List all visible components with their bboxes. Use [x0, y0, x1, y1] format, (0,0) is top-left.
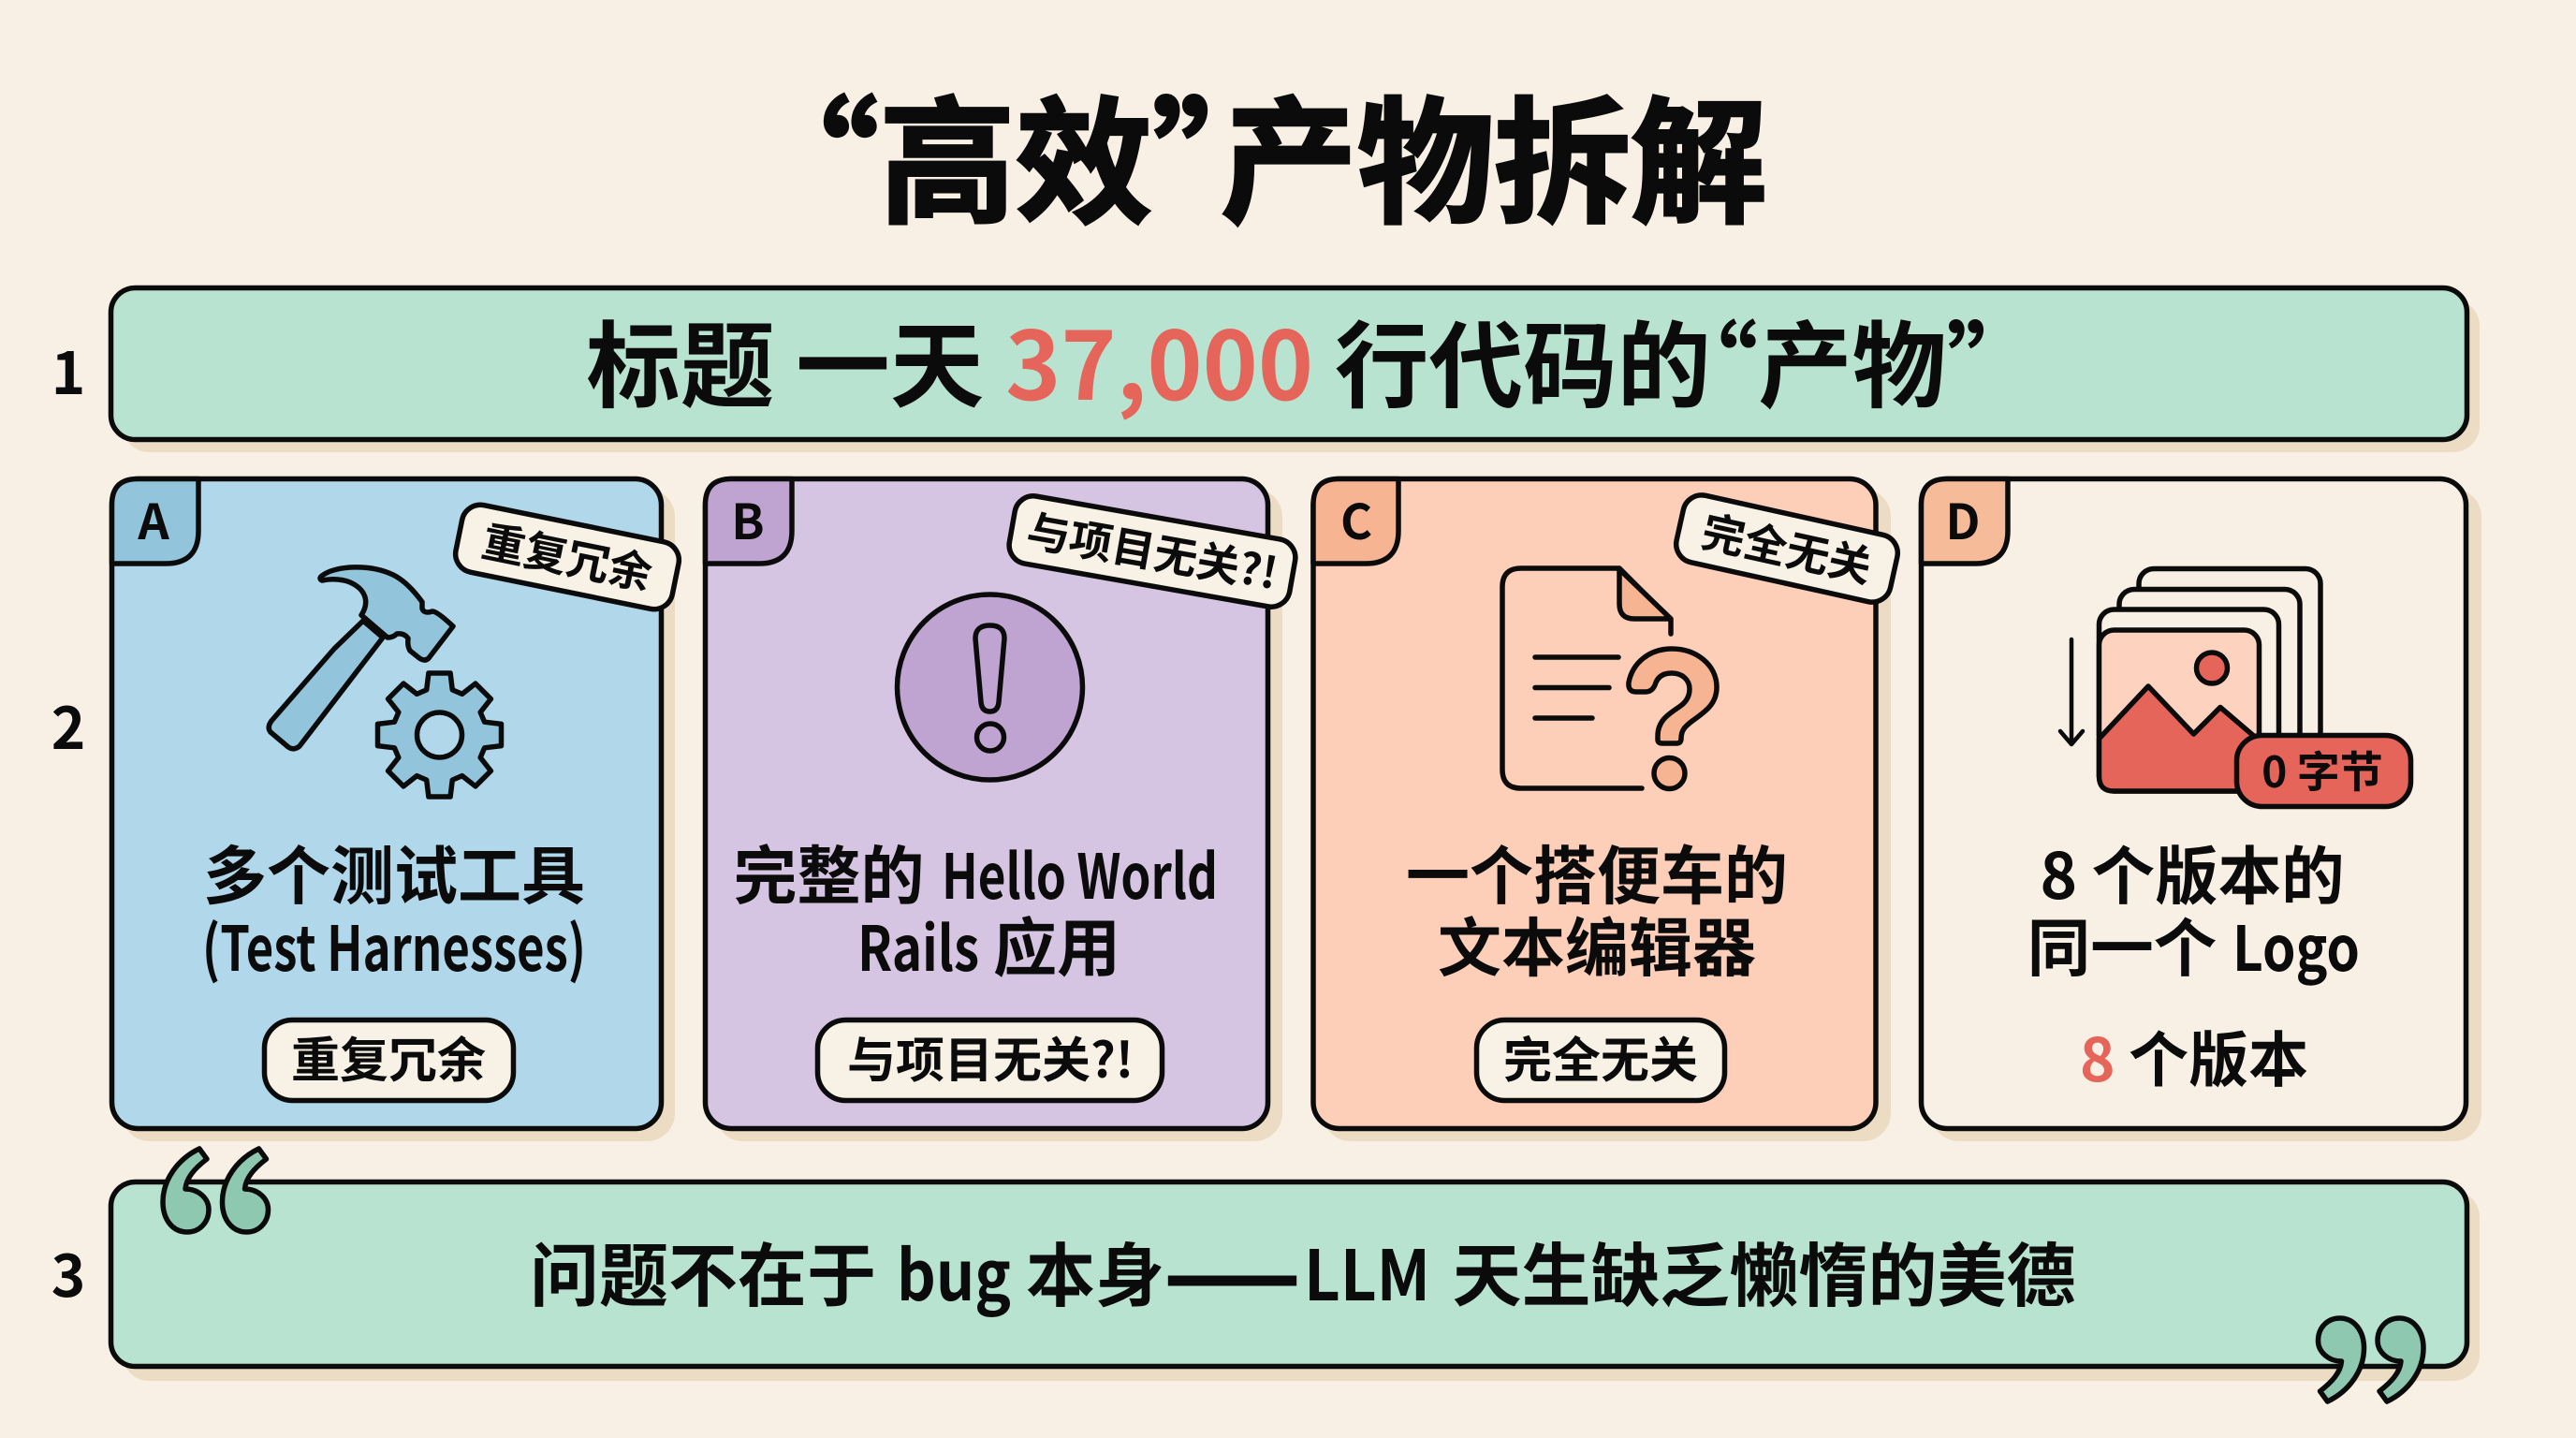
- quote text: 本身: [1026, 1221, 1164, 1321]
- tab A: A: [137, 483, 169, 553]
- panel: headline banner: [110, 288, 2480, 452]
- quote text: 问题不在于: [530, 1221, 876, 1321]
- card A title: [202, 825, 586, 990]
- card C title: 文本编辑器: [1438, 897, 1756, 990]
- card B title: Rails: [857, 900, 979, 990]
- card D title: 8 个版本的: [2040, 827, 2345, 917]
- card A title: (Test Harnesses): [202, 900, 586, 990]
- badge: 0 字节: [2237, 736, 2411, 807]
- pill: 完全无关: [1477, 1020, 1724, 1101]
- card C title: 一个搭便车的: [1406, 825, 1788, 917]
- card C title: [1406, 825, 1788, 990]
- version count: 8 个版本: [2080, 1013, 2308, 1099]
- arrow: down: [2060, 639, 2083, 744]
- row number 2: 2: [51, 682, 85, 766]
- card B title: [733, 825, 1218, 990]
- sticker: 重复冗余: 重复冗余: [477, 507, 658, 603]
- panel: card D logo versions: [1921, 479, 2481, 1141]
- sticker: 完全无关: 完全无关: [1696, 498, 1878, 595]
- tab B: [706, 479, 792, 564]
- quote text: LLM: [1304, 1221, 1430, 1321]
- panel: card C text editor: [1313, 479, 1901, 1141]
- headline text: 标题 一天 37,000 行代码的“产物”: [586, 290, 1994, 427]
- quote text: ——: [1166, 1221, 1298, 1321]
- sticker: 完全无关: [1673, 492, 1901, 606]
- tab C: C: [1340, 483, 1372, 553]
- sticker: 重复冗余: [452, 502, 682, 612]
- tab D: D: [1945, 483, 1981, 553]
- sticker: 与项目无关: 与项目无关?!: [1022, 497, 1282, 602]
- card D title: Logo: [2232, 900, 2360, 990]
- card D title: 同一个: [2027, 899, 2217, 990]
- tab B: B: [731, 483, 765, 553]
- quote text: bug: [897, 1221, 1011, 1321]
- tab C: [1313, 479, 1398, 564]
- row number 1: 1: [51, 327, 85, 411]
- tab A: [112, 479, 198, 564]
- quote text: 天生缺乏懒惰的美德: [1453, 1221, 2076, 1321]
- card B title: 完整的: [733, 825, 925, 917]
- badge: 0 字节: 0 字节: [2261, 739, 2383, 800]
- icon: stacked images with size badge: [2060, 569, 2411, 807]
- pill: 与项目无关: 与项目无关?!: [847, 1021, 1134, 1092]
- icon: document with question mark: [1502, 568, 1717, 788]
- row number 3: 3: [51, 1229, 85, 1313]
- card B title: 应用: [993, 897, 1120, 990]
- pill: 重复冗余: 重复冗余: [291, 1021, 486, 1092]
- card A title: 多个测试工具: [203, 825, 585, 917]
- panel: quote banner: [110, 1149, 2480, 1401]
- tab D: [1921, 479, 2008, 564]
- title: “高效”产物拆解: [811, 54, 1767, 252]
- icon: hammer and gear: [269, 567, 502, 797]
- pill: 重复冗余: [264, 1020, 513, 1101]
- card D title: [2027, 827, 2360, 990]
- icon: exclamation circle: [897, 594, 1082, 780]
- pill: 完全无关: 完全无关: [1503, 1021, 1698, 1092]
- panel: card B hello world: [706, 479, 1298, 1141]
- icon: opening quote marks: [163, 1149, 268, 1232]
- icon: closing quote marks: [2318, 1318, 2423, 1401]
- card B title: Hello World: [942, 828, 1218, 917]
- panel: card A test harnesses: [112, 479, 682, 1141]
- quote text: [530, 1221, 2076, 1321]
